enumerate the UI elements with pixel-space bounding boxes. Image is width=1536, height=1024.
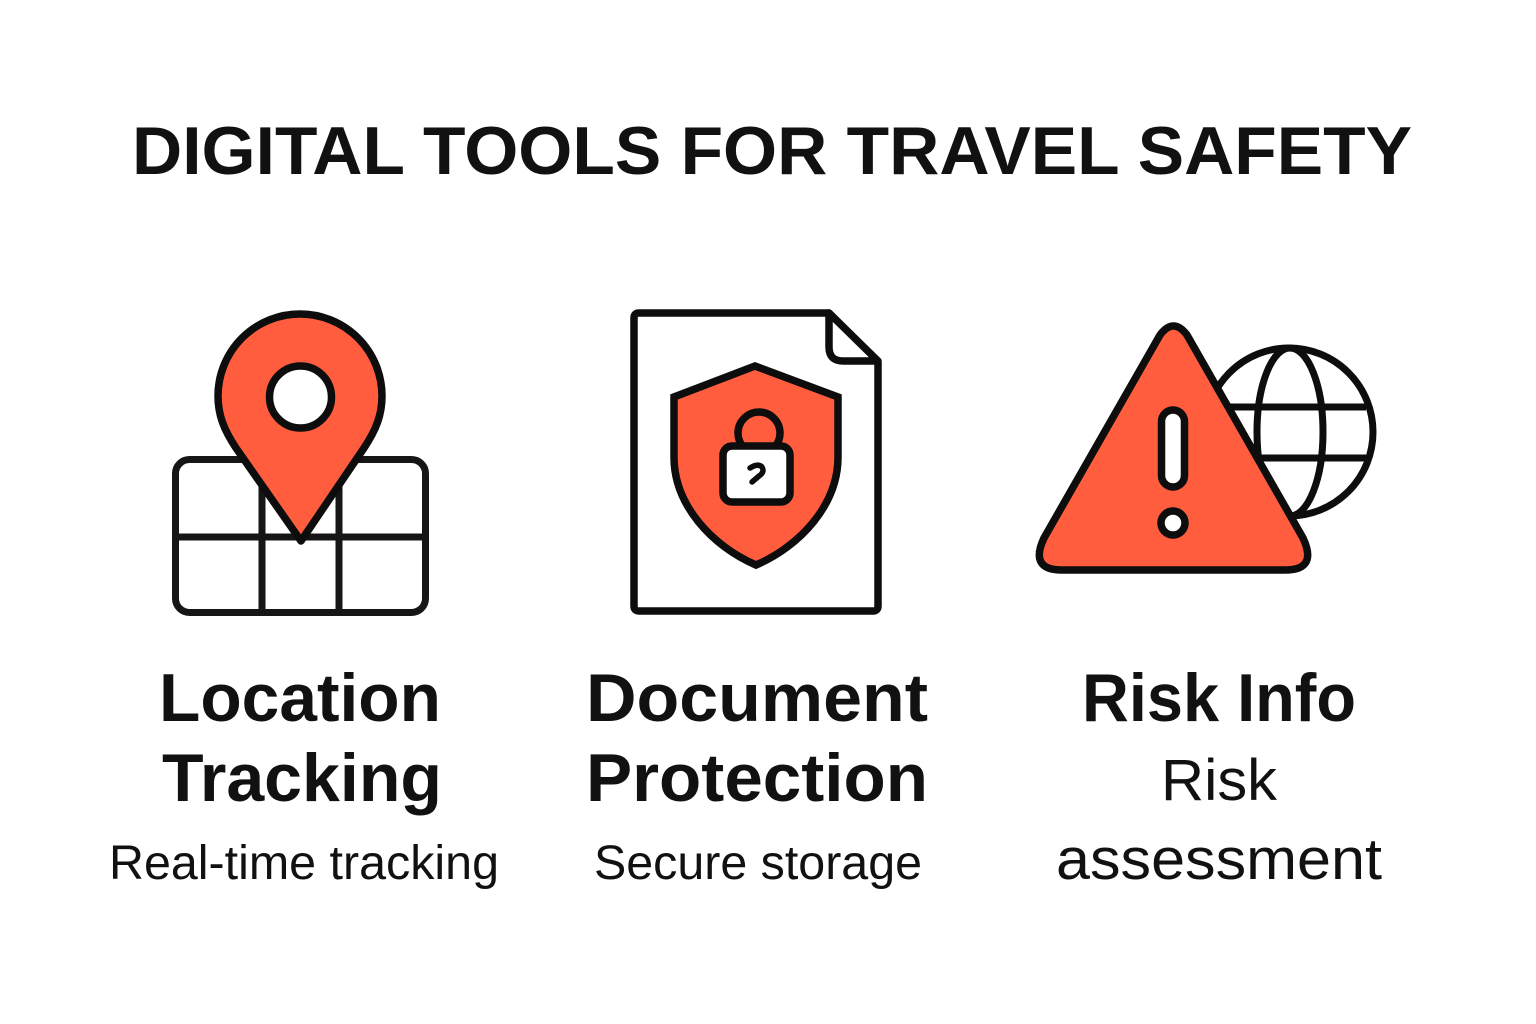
text block: location tracking: Real-time tracking bbox=[109, 837, 499, 890]
text block: location tracking: Tracking bbox=[162, 740, 442, 816]
text block: document protection: Document bbox=[586, 660, 928, 736]
icon: document with shield and lock bbox=[634, 313, 878, 611]
text block: document protection: Secure storage bbox=[594, 837, 922, 890]
text block: location tracking bbox=[109, 660, 499, 890]
icon: warning triangle with globe bbox=[1039, 326, 1373, 570]
icon: map with location pin bbox=[176, 314, 426, 612]
text block: location tracking: Location bbox=[159, 660, 441, 736]
text block: risk info bbox=[1056, 660, 1382, 892]
text block: risk info: Risk Info bbox=[1082, 660, 1356, 736]
title: DIGITAL TOOLS FOR TRAVEL SAFETY bbox=[132, 113, 1412, 189]
text block: document protection bbox=[586, 660, 928, 890]
text block: risk info: Risk bbox=[1161, 748, 1278, 813]
text block: document protection: Protection bbox=[586, 740, 928, 816]
text block: risk info: assessment bbox=[1056, 827, 1382, 892]
